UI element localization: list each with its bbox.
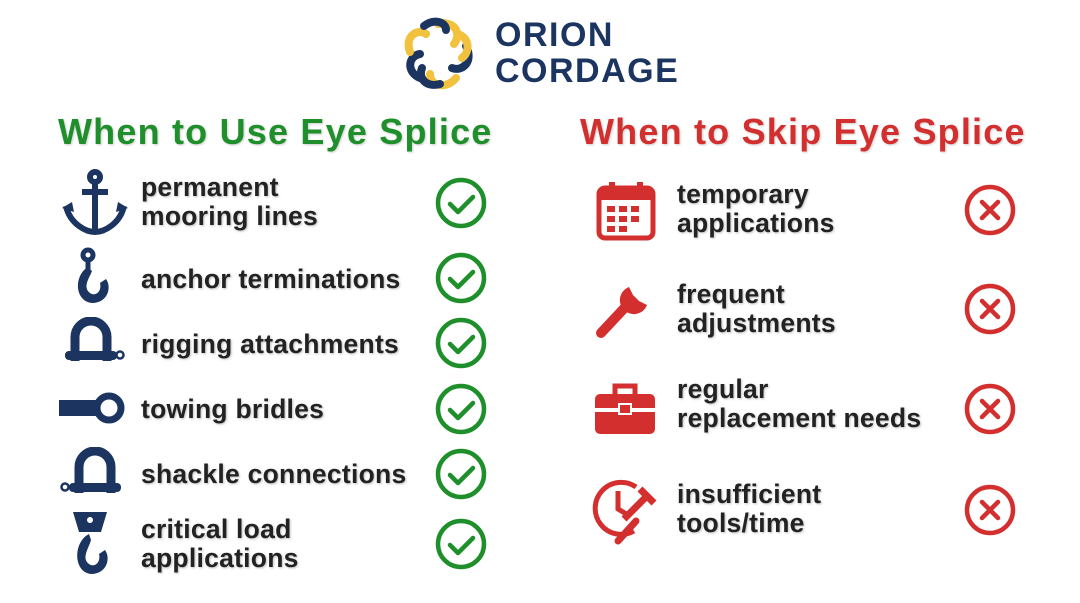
- item: adjustments: [677, 308, 836, 338]
- icon: knot: [404, 18, 473, 90]
- item: [677, 279, 836, 340]
- item: [677, 479, 822, 538]
- heading: use: When to Use Eye Splice: [58, 111, 493, 152]
- item: regular: [677, 374, 769, 404]
- item: applications: [141, 543, 299, 573]
- panel: use list: [59, 169, 407, 574]
- icon: towing eye: [59, 392, 124, 424]
- icon: shackle: [60, 447, 121, 493]
- brand name: [495, 16, 679, 90]
- panel: skip list: [592, 179, 922, 544]
- item: temporary: [677, 179, 809, 209]
- item: rigging attachments: [141, 329, 399, 359]
- item: permanent: [141, 172, 279, 202]
- icon: calendar: [596, 182, 656, 240]
- icon: clock with hammer: [592, 480, 656, 544]
- item: mooring lines: [141, 201, 318, 231]
- icon: toolbox: [595, 384, 655, 434]
- icon: anchor: [62, 169, 128, 235]
- item: [141, 514, 300, 574]
- heading: skip: When to Skip Eye Splice: [580, 111, 1026, 152]
- item: [141, 172, 318, 232]
- brand name: ORION: [495, 16, 614, 54]
- item: frequent: [677, 279, 785, 309]
- icon: shackle: [65, 317, 125, 361]
- logo: [404, 16, 679, 90]
- checkmarks: [436, 178, 486, 570]
- item: applications: [677, 208, 835, 238]
- item: towing bridles: [141, 394, 324, 424]
- item: anchor terminations: [141, 264, 400, 294]
- x marks: [964, 184, 1016, 536]
- icon: block hook: [73, 512, 108, 574]
- item: critical load: [141, 514, 292, 544]
- icon: wrench: [596, 287, 647, 338]
- item: [677, 374, 922, 434]
- item: insufficient: [677, 479, 821, 509]
- brand name: CORDAGE: [495, 52, 679, 90]
- item: [677, 179, 836, 240]
- item: tools/time: [677, 508, 805, 538]
- item: shackle connections: [141, 459, 406, 489]
- item: replacement needs: [677, 403, 921, 433]
- icon: hook: [78, 248, 109, 303]
